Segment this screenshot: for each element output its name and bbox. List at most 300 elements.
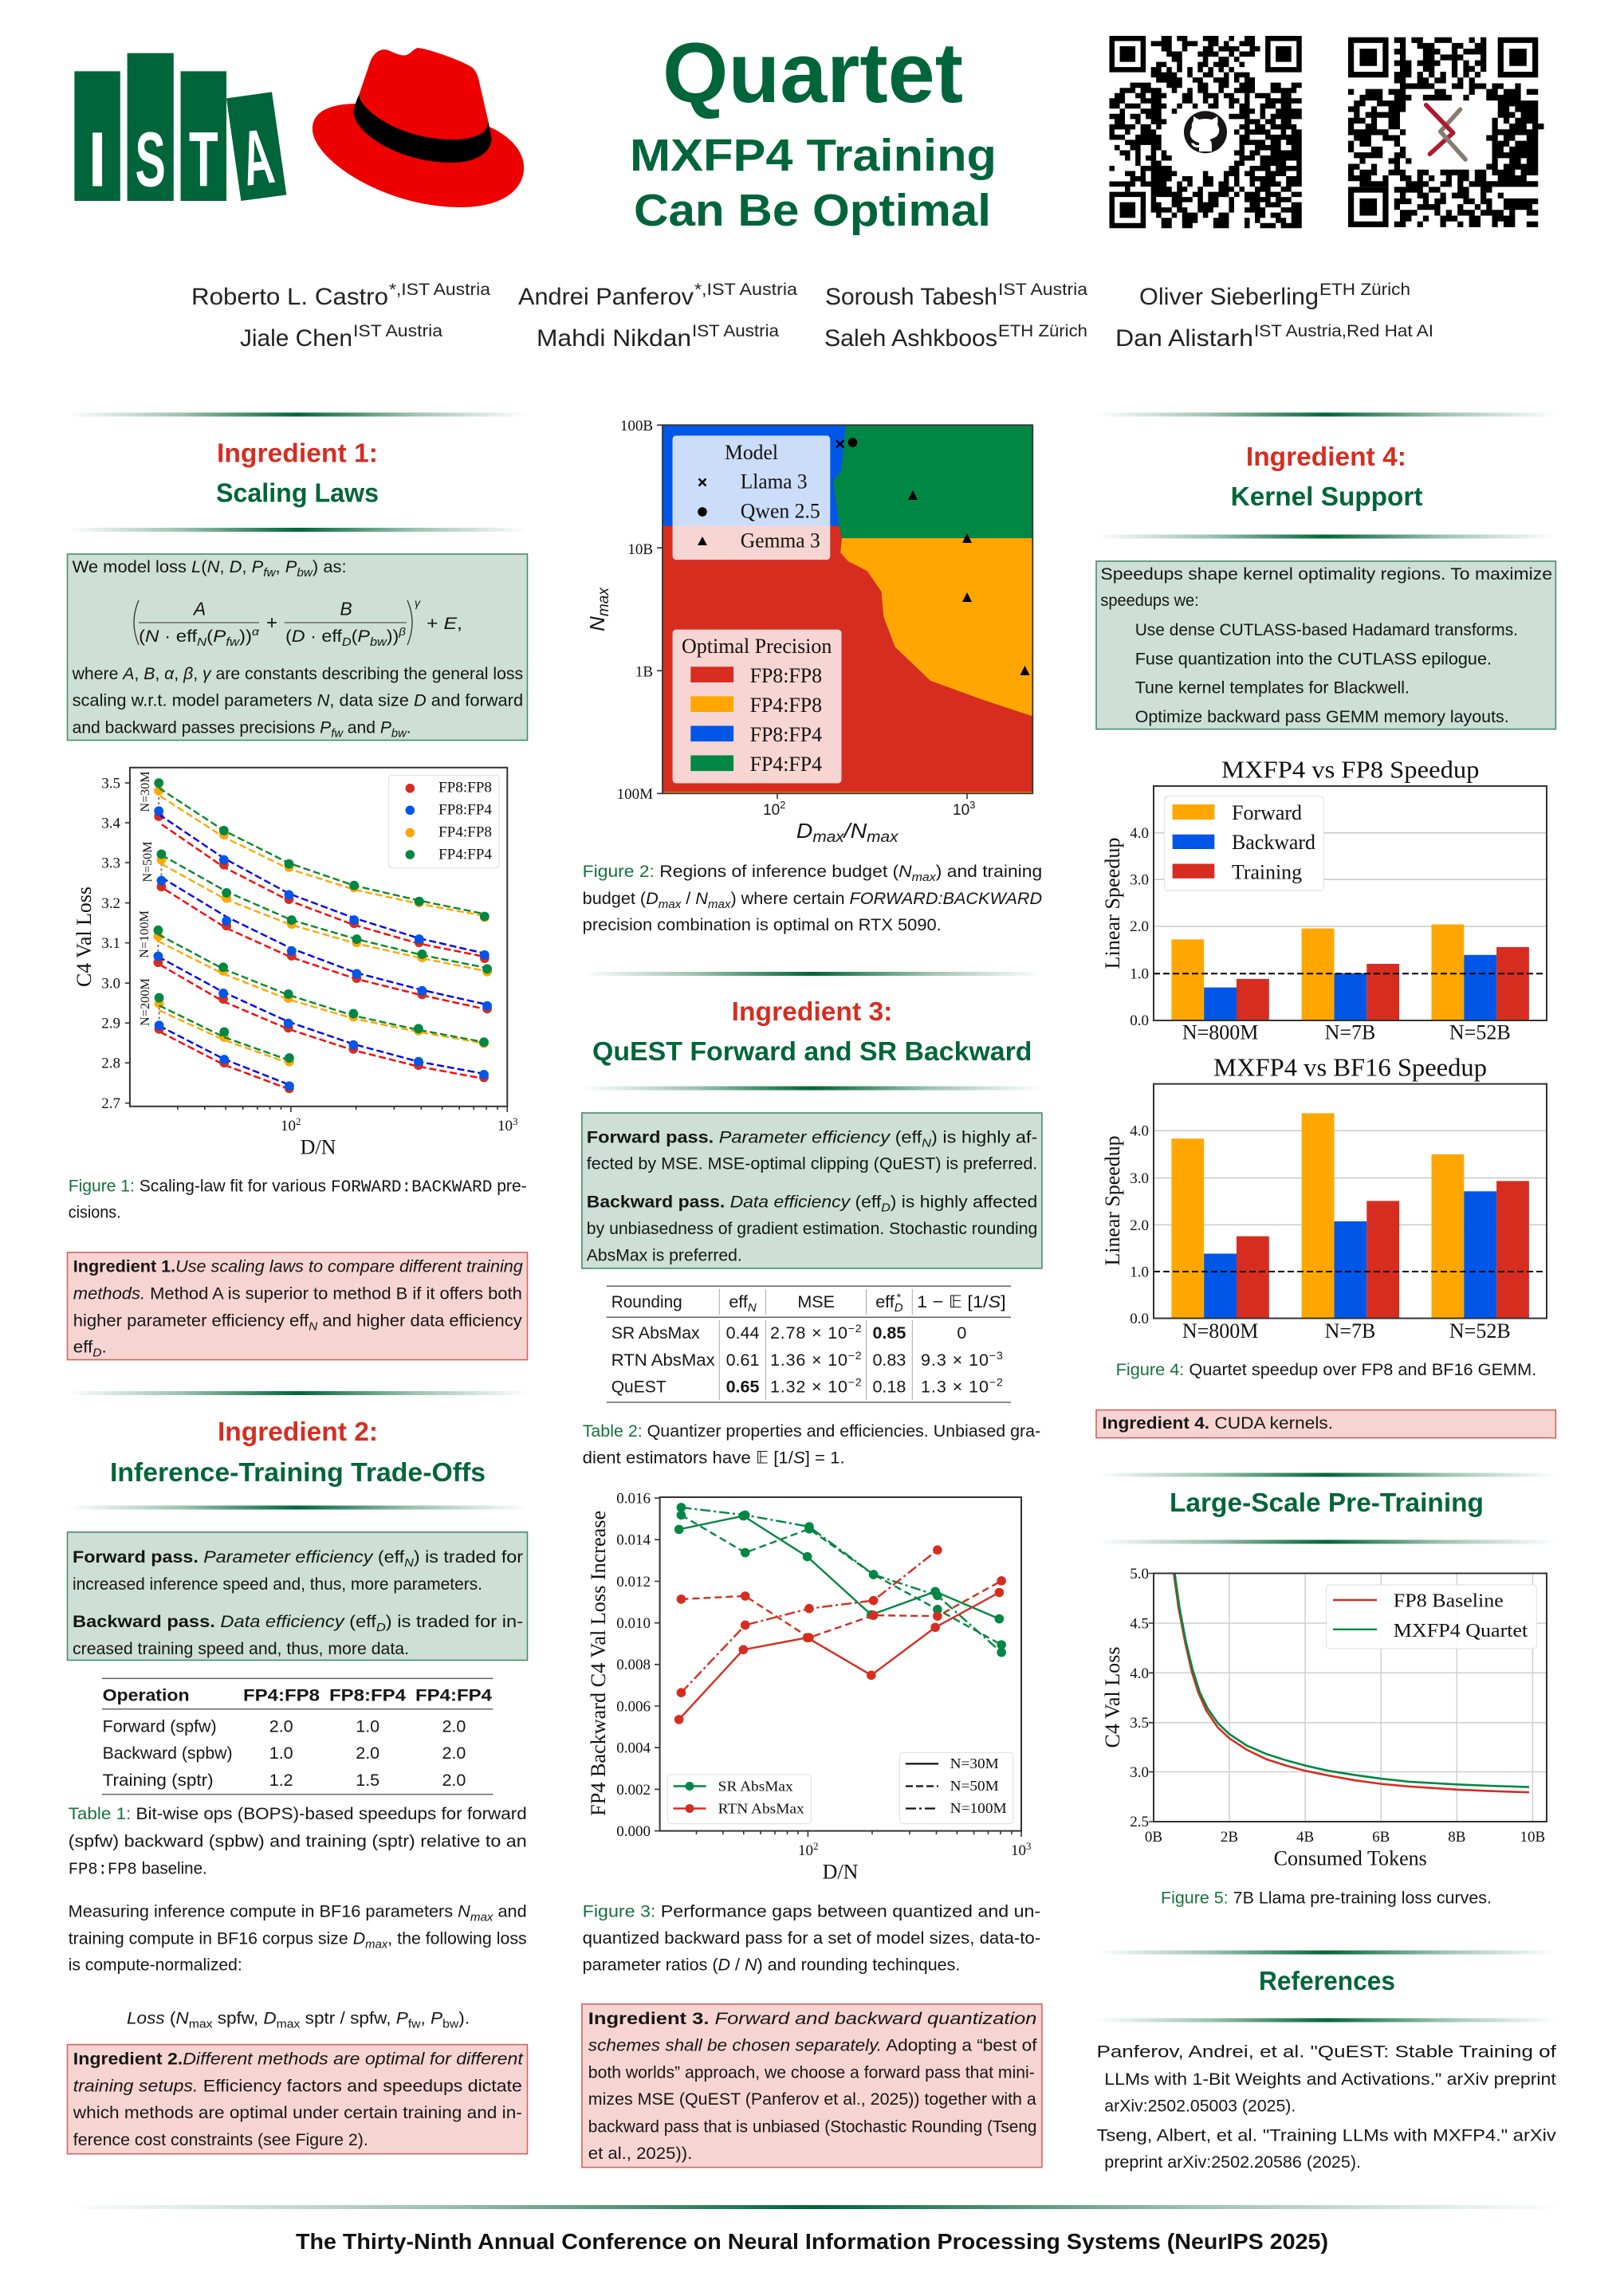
formula: scaling law: P bbox=[213, 627, 226, 646]
chart: pre-training loss curves (figure 5) bbox=[1101, 1566, 1547, 1870]
authors: Dan Alistarh bbox=[1115, 325, 1253, 352]
heading: Ingredient 1: Ingredient 1: bbox=[217, 438, 378, 467]
formula: scaling law: B bbox=[340, 598, 352, 619]
text block: compute-normalized loss: max bbox=[365, 1937, 388, 1951]
chart: pre-training loss curves (figure 5): C4 Val Loss bbox=[1101, 1647, 1124, 1748]
formula: scaling law: A bbox=[192, 598, 206, 619]
table 2: quantizer properties: 0.65 bbox=[726, 1377, 759, 1396]
chart: MXFP4 vs BF16 speedup bbox=[1101, 1052, 1547, 1343]
panel: kernel speedups: Fuse quantization into the CUTLASS epilogue. bbox=[1135, 649, 1492, 668]
text block: references: Tseng, Albert, et al. "Training LLMs with MXFP4." arXiv bbox=[1097, 2126, 1556, 2145]
panel: QuEST and SR explanation: Forward pass. Parameter efficiency (eff bbox=[587, 1127, 919, 1146]
text block: compute-normalized loss: , bbox=[421, 2009, 431, 2028]
authors: Jiale Chen bbox=[240, 325, 352, 352]
chart: scaling-law fit (figure 1): N=50M bbox=[141, 842, 155, 882]
chart: pre-training loss curves (figure 5): 4.5 bbox=[1130, 1615, 1149, 1633]
text block: compute-normalized loss: sptr / spfw, bbox=[300, 2009, 396, 2028]
table 1: speedups: 2.0 bbox=[356, 1744, 379, 1763]
chart: optimal precision regions (figure 2): max bbox=[812, 829, 845, 846]
table 1: speedups: 1.5 bbox=[356, 1771, 379, 1790]
chart: MXFP4 vs FP8 speedup: 3.0 bbox=[1130, 872, 1149, 888]
panel: QuEST and SR explanation: Backward pass. Data efficiency (eff bbox=[587, 1192, 879, 1211]
table 2: quantizer properties: 1.36 × 10 bbox=[770, 1350, 847, 1370]
caption: figure 1: Figure 1: Scaling-law fit for various FORWARD:BACKWARD pre- bbox=[69, 1176, 527, 1197]
logo: Red Hat bbox=[313, 48, 524, 207]
chart: scaling-law fit (figure 1): 3.3 bbox=[101, 855, 120, 872]
chart: optimal precision regions (figure 2): 1B bbox=[635, 663, 653, 680]
chart: scaling-law fit (figure 1) bbox=[73, 768, 518, 1159]
table 2: quantizer properties bbox=[607, 1286, 1011, 1402]
chart: MXFP4 vs BF16 speedup: 2.0 bbox=[1130, 1217, 1149, 1234]
panel: QuEST and SR explanation: N bbox=[922, 1136, 931, 1150]
authors: Roberto L. Castro bbox=[191, 284, 388, 310]
heading: Ingredient 4: Kernel Support bbox=[1231, 482, 1422, 511]
chart: scaling-law fit (figure 1): 3.2 bbox=[101, 895, 120, 912]
chart: pre-training loss curves (figure 5): 5.0 bbox=[1130, 1566, 1149, 1582]
chart: MXFP4 vs FP8 speedup: N=800M bbox=[1182, 1021, 1258, 1044]
chart: rounding performance gaps (figure 3): 0.016 bbox=[616, 1491, 651, 1507]
panel: QuEST and SR explanation: D bbox=[881, 1201, 891, 1214]
formula: scaling law: γ bbox=[415, 596, 421, 609]
callout: ingredient 1: . bbox=[102, 1337, 107, 1356]
model markers bbox=[836, 438, 1030, 675]
text block: compute-normalized loss: and bbox=[493, 1902, 527, 1921]
callout: ingredient 3 bbox=[582, 2004, 1042, 2168]
table 1: speedups: 2.0 bbox=[442, 1716, 466, 1736]
panel: forward and backward pass trade-offs: Forward pass. Parameter efficiency (eff bbox=[73, 1547, 402, 1567]
chart: MXFP4 vs BF16 speedup: 4.0 bbox=[1130, 1122, 1149, 1140]
table 1: speedups: Training (sptr) bbox=[103, 1771, 214, 1790]
text block: compute-normalized loss: ). bbox=[458, 2009, 470, 2028]
caption: table 2: Table 2: Quantizer properties and efficiencies. Unbiased gra- bbox=[583, 1421, 1040, 1441]
caption: table 1: Table 1: Bit-wise ops (BOPS)-based speedups for forward bbox=[69, 1804, 527, 1823]
panel: QuEST and SR explanation bbox=[582, 1113, 1042, 1268]
formula: scaling law bbox=[134, 596, 462, 649]
panel: loss model: , bbox=[276, 557, 285, 576]
chart: scaling-law fit (figure 1): 2.7 bbox=[101, 1095, 120, 1112]
panel: forward and backward pass trade-offs: D bbox=[376, 1621, 386, 1634]
text block: references bbox=[1097, 2042, 1556, 2172]
authors: Andrei Panferov bbox=[518, 284, 694, 310]
legend: forward, backward, training: Forward bbox=[1232, 801, 1302, 824]
panel: loss model: bw bbox=[391, 727, 407, 741]
logo: ISTA: T bbox=[189, 116, 218, 203]
table 2: quantizer properties: Rounding bbox=[611, 1292, 682, 1311]
panel: QuEST and SR explanation: fected by MSE. MSE-optimal clipping (QuEST) is preferred. bbox=[587, 1154, 1037, 1174]
chart: pre-training loss curves (figure 5): 8B bbox=[1448, 1829, 1465, 1846]
chart: scaling-law fit (figure 1): 3 bbox=[513, 1115, 518, 1127]
table 1: speedups: Operation bbox=[103, 1685, 190, 1704]
caption: figure 2: budget (D bbox=[583, 889, 659, 908]
chart: rounding performance gaps (figure 3): 0.006 bbox=[616, 1698, 651, 1716]
table 2: quantizer properties: 0.18 bbox=[872, 1377, 906, 1396]
panel: loss model: ) as: bbox=[313, 557, 347, 576]
chart: pre-training loss curves (figure 5): 6B bbox=[1372, 1829, 1390, 1846]
panel: forward and backward pass trade-offs: N bbox=[404, 1556, 414, 1570]
legend: model markers: Gemma 3 bbox=[741, 529, 820, 552]
callout: ingredient 3: backward pass that is unbiased (Stochastic Rounding (Tseng bbox=[588, 2117, 1036, 2136]
chart: scaling-law fit (figure 1): 3.1 bbox=[101, 935, 120, 952]
caption: table 2: dient estimators have 𝔼 [1/ S] = 1. bbox=[583, 1449, 845, 1468]
chart: optimal precision regions (figure 2): D bbox=[796, 819, 812, 843]
formula: scaling law: + E, bbox=[427, 614, 462, 633]
table 1: speedups bbox=[102, 1678, 493, 1795]
table 2: quantizer properties: 2.78 × 10 bbox=[770, 1323, 847, 1343]
table 1: speedups: FP4:FP8 bbox=[243, 1685, 320, 1704]
heading: Ingredient 1: Scaling Laws bbox=[216, 478, 379, 507]
panel: loss model: and bbox=[343, 718, 380, 737]
chart: scaling-law fit (figure 1): 10 bbox=[281, 1118, 296, 1134]
panel: forward and backward pass trade-offs bbox=[67, 1532, 528, 1660]
legend: optimal precision: FP8:FP4 bbox=[750, 723, 822, 746]
authors: Mahdi Nikdan bbox=[537, 325, 691, 352]
panel: loss model: fw bbox=[331, 727, 344, 741]
formula: scaling law: + bbox=[266, 612, 277, 634]
heading: Ingredient 2 bbox=[110, 1417, 486, 1487]
table 2: quantizer properties: MSE bbox=[797, 1292, 835, 1311]
chart: pre-training loss curves (figure 5): 3.5 bbox=[1130, 1715, 1149, 1732]
legend: model size bbox=[899, 1752, 1013, 1824]
table 2: quantizer properties: 1.32 × 10 bbox=[770, 1377, 847, 1396]
panel: kernel speedups: Speedups shape kernel optimality regions. To maximize bbox=[1100, 564, 1552, 584]
caption: figure 2: ) and training bbox=[936, 862, 1042, 881]
panel: forward and backward pass trade-offs: Backward pass. Data efficiency (eff bbox=[73, 1612, 373, 1631]
heading: Ingredient 2: Ingredient 2: bbox=[218, 1417, 378, 1446]
chart: pre-training loss curves (figure 5): 3.0 bbox=[1130, 1764, 1149, 1781]
formula: scaling law: fw bbox=[226, 635, 240, 649]
chart: scaling-law fit (figure 1): N=30M bbox=[139, 772, 152, 812]
authors: *,IST Austria bbox=[694, 281, 797, 299]
chart: scaling-law fit (figure 1): 10 bbox=[497, 1118, 513, 1134]
chart: MXFP4 vs BF16 speedup: 0.0 bbox=[1130, 1311, 1149, 1327]
caption: figure 2: ) where certain bbox=[730, 889, 850, 908]
legend: forward, backward, training: Backward bbox=[1232, 831, 1315, 854]
chart: MXFP4 vs BF16 speedup: 3.0 bbox=[1130, 1170, 1149, 1187]
chart: MXFP4 vs FP8 speedup: N=7B bbox=[1325, 1021, 1375, 1044]
authors: Oliver Sieberling bbox=[1139, 284, 1319, 310]
panel: kernel speedups: Use dense CUTLASS-based Hadamard transforms. bbox=[1135, 620, 1518, 639]
legend: model size: N=50M bbox=[950, 1778, 999, 1794]
table 2: quantizer properties: 1.3 × 10 bbox=[921, 1377, 989, 1396]
chart: pre-training loss curves (figure 5): 10B bbox=[1520, 1829, 1545, 1846]
callout: ingredient 3: mizes MSE (QuEST (Panferov et al., 2025)) together with a bbox=[588, 2090, 1036, 2109]
legend: optimal precision: FP4:FP8 bbox=[750, 694, 822, 717]
legend: forward, backward, training bbox=[1164, 796, 1323, 890]
authors: IST Austria,Red Hat AI bbox=[1254, 322, 1433, 340]
table 1: speedups: 2.0 bbox=[442, 1744, 466, 1763]
chart: scaling-law fit (figure 1): 2.9 bbox=[101, 1016, 120, 1032]
chart: rounding performance gaps (figure 3): 0.010 bbox=[616, 1615, 651, 1632]
legend: model markers: Llama 3 bbox=[741, 470, 808, 493]
caption: figure 2: / bbox=[681, 889, 695, 908]
panel: loss model: . bbox=[407, 718, 411, 737]
panel: loss model: fw bbox=[263, 566, 277, 580]
text block: references: LLMs with 1-Bit Weights and Activations." arXiv preprint bbox=[1104, 2070, 1556, 2089]
caption: figure 3: Figure 3: Performance gaps between quantized and un- bbox=[583, 1901, 1040, 1921]
panel: loss model: P bbox=[285, 557, 297, 576]
chart: rounding performance gaps (figure 3): D/N bbox=[823, 1861, 859, 1884]
caption: figure 2 bbox=[583, 862, 1042, 934]
chart: MXFP4 vs BF16 speedup: N=7B bbox=[1325, 1319, 1375, 1343]
chart: rounding performance gaps (figure 3): 0.008 bbox=[616, 1657, 651, 1673]
chart: MXFP4 vs FP8 speedup: Linear Speedup bbox=[1101, 838, 1124, 969]
formula: scaling law: N bbox=[197, 635, 206, 649]
callout: ingredient 1: eff bbox=[73, 1337, 92, 1356]
chart: MXFP4 vs FP8 speedup bbox=[1101, 755, 1547, 1044]
footer: The Thirty-Ninth Annual Conference on Neural Information Processing Systems (NeurIPS 2025) bbox=[296, 2229, 1328, 2254]
text block: compute-normalized loss bbox=[69, 1902, 527, 2031]
caption: table 1: FP8:FP8 baseline. bbox=[69, 1858, 207, 1879]
chart: rounding performance gaps (figure 3) bbox=[587, 1491, 1032, 1884]
caption: figure 2: max bbox=[912, 871, 936, 884]
legend: baseline vs Quartet: MXFP4 Quartet bbox=[1394, 1621, 1528, 1641]
callout: ingredient 1: higher parameter efficiency eff bbox=[73, 1311, 303, 1330]
table 1: speedups: 1.0 bbox=[356, 1716, 379, 1736]
formula: scaling law: α bbox=[252, 625, 260, 638]
text block: compute-normalized loss: D bbox=[263, 2009, 277, 2028]
legend: figure 1: FP4:FP8 bbox=[438, 824, 492, 840]
authors: *,IST Austria bbox=[389, 281, 490, 299]
callout: ingredient 2: ference cost constraints (see Figure 2). bbox=[73, 2130, 368, 2149]
chart: MXFP4 vs BF16 speedup: 1.0 bbox=[1130, 1264, 1149, 1280]
chart: pre-training loss curves (figure 5): 2.5 bbox=[1130, 1814, 1149, 1830]
table 2: quantizer properties: 9.3 × 10 bbox=[921, 1350, 989, 1370]
text block: compute-normalized loss: fw bbox=[408, 2017, 421, 2031]
authors: Saleh Ashkboos bbox=[824, 325, 997, 352]
legend: figure 1 bbox=[388, 775, 499, 868]
logo: ISTA: S bbox=[136, 116, 166, 203]
authors: IST Austria bbox=[998, 281, 1087, 299]
legend: figure 1: FP4:FP4 bbox=[438, 847, 493, 863]
chart: scaling-law fit (figure 1): 3.4 bbox=[101, 815, 121, 832]
legend: model markers: Model bbox=[725, 441, 778, 464]
table 2: quantizer properties: −2 bbox=[848, 1375, 862, 1388]
authors: Soroush Tabesh bbox=[825, 284, 997, 310]
title: Quartet bbox=[663, 25, 963, 120]
chart: MXFP4 vs FP8 speedup: MXFP4 vs FP8 Speedup bbox=[1221, 755, 1480, 783]
formula: scaling law: )) bbox=[387, 627, 399, 646]
legend: optimal precision: Optimal Precision bbox=[682, 635, 832, 658]
formula: scaling law: ( bbox=[352, 627, 358, 646]
table 1: speedups: FP4:FP4 bbox=[415, 1685, 492, 1704]
chart: scaling-law fit (figure 1): 3.5 bbox=[101, 775, 120, 792]
callout: ingredient 3: Ingredient 3. Forward and backward quantization bbox=[588, 2009, 1036, 2028]
panel: loss model: bw bbox=[297, 566, 313, 580]
table 2: quantizer properties: QuEST bbox=[611, 1377, 667, 1396]
chart: MXFP4 vs FP8 speedup: N=52B bbox=[1449, 1021, 1511, 1044]
logo: ISTA: A bbox=[235, 113, 279, 202]
legend: rounding method: RTN AbsMax bbox=[718, 1800, 804, 1816]
chart: rounding performance gaps (figure 3): 0.002 bbox=[616, 1782, 651, 1799]
text block: compute-normalized loss: max bbox=[277, 2017, 301, 2031]
chart: optimal precision regions (figure 2): max bbox=[596, 587, 612, 616]
chart: rounding performance gaps (figure 3): 0.014 bbox=[616, 1532, 651, 1549]
heading: Ingredient 1 bbox=[216, 438, 379, 507]
logo: ISTA: I bbox=[88, 116, 107, 203]
callout: ingredient 3: et al., 2025)). bbox=[588, 2144, 692, 2163]
heading: References: References bbox=[1259, 1966, 1395, 1995]
panel: forward and backward pass trade-offs: ) is traded for bbox=[414, 1547, 523, 1567]
formula: scaling law: )) bbox=[239, 627, 252, 646]
callout: ingredient 2 bbox=[67, 2045, 528, 2154]
panel: loss model: P bbox=[380, 718, 392, 737]
caption: figure 1: cisions. bbox=[69, 1203, 121, 1222]
QR code: paper bbox=[1348, 37, 1543, 227]
callout: ingredient 2: which methods are optimal under certain training and in- bbox=[73, 2103, 522, 2122]
table 2: quantizer properties: 0.83 bbox=[872, 1350, 906, 1370]
panel: forward and backward pass trade-offs: increased inference speed and, thus, more parameters. bbox=[73, 1575, 482, 1594]
panel: loss model: scaling w.r.t. model parameters N, data size D and forward bbox=[73, 691, 523, 710]
table 2: quantizer properties: 0.85 bbox=[872, 1323, 906, 1343]
table 2: quantizer properties: D bbox=[895, 1301, 903, 1315]
authors: IST Austria bbox=[692, 322, 779, 340]
chart: optimal precision regions (figure 2): 10 bbox=[763, 802, 780, 819]
table 2: quantizer properties: eff bbox=[729, 1292, 748, 1311]
callout: ingredient 2: Ingredient 2. Different methods are optimal for different bbox=[73, 2049, 524, 2068]
legend: optimal precision: FP8:FP8 bbox=[750, 664, 822, 687]
caption: figure 2: Figure 2: Regions of inference budget ( N bbox=[583, 862, 911, 881]
chart: scaling-law fit (figure 1): 3.0 bbox=[101, 976, 120, 992]
chart: MXFP4 vs FP8 speedup: 1.0 bbox=[1130, 966, 1149, 982]
title bbox=[630, 25, 997, 236]
callout: ingredient 4 bbox=[1096, 1410, 1555, 1438]
text block: compute-normalized loss: training compute in BF16 corpus size D bbox=[69, 1928, 365, 1948]
chart: MXFP4 vs BF16 speedup: N=800M bbox=[1182, 1319, 1258, 1343]
chart: optimal precision regions (figure 2) bbox=[585, 418, 1032, 846]
chart: rounding performance gaps (figure 3): 0.004 bbox=[616, 1740, 651, 1757]
panel: loss model bbox=[67, 554, 528, 741]
caption: figure 5: Figure 5: 7B Llama pre-training loss curves. bbox=[1161, 1888, 1492, 1907]
formula: scaling law: P bbox=[357, 627, 371, 646]
caption: figure 3: parameter ratios (D / N) and rounding techinques. bbox=[583, 1956, 960, 1975]
table 2: quantizer properties: −2 bbox=[848, 1349, 862, 1362]
chart: pre-training loss curves (figure 5): 2B bbox=[1221, 1829, 1238, 1846]
chart: scaling-law fit (figure 1): D/N bbox=[301, 1135, 336, 1159]
chart: optimal precision regions (figure 2): 100B bbox=[620, 418, 653, 434]
chart: MXFP4 vs FP8 speedup: 2.0 bbox=[1130, 918, 1149, 935]
formula: scaling law: ( bbox=[206, 627, 214, 646]
caption: figure 2: FORWARD:BACKWARD bbox=[850, 889, 1042, 908]
table 2: quantizer properties: −2 bbox=[989, 1375, 1003, 1388]
text block: compute-normalized loss: P bbox=[396, 2009, 408, 2028]
table 2: quantizer properties: 0 bbox=[957, 1323, 966, 1343]
callout: ingredient 2: training setups. Efficiency factors and speedups dictate bbox=[73, 2076, 522, 2095]
panel: kernel speedups: Optimize backward pass GEMM memory layouts. bbox=[1135, 707, 1509, 726]
authors: ETH Zürich bbox=[1319, 281, 1410, 299]
text block: compute-normalized loss: max bbox=[470, 1910, 493, 1924]
panel: QuEST and SR explanation: ) is highly af- bbox=[931, 1127, 1037, 1146]
legend: model markers: Qwen 2.5 bbox=[741, 499, 820, 522]
chart: rounding performance gaps (figure 3): 0.000 bbox=[616, 1823, 651, 1840]
caption: figure 1 bbox=[69, 1176, 527, 1222]
chart: optimal precision regions (figure 2): max bbox=[867, 829, 899, 846]
callout: ingredient 1: N bbox=[309, 1319, 317, 1333]
panel: kernel speedups bbox=[1096, 561, 1555, 729]
table 1: speedups: 1.0 bbox=[269, 1744, 293, 1763]
legend: optimal precision: FP4:FP4 bbox=[750, 753, 822, 776]
text block: references: preprint arXiv:2502.20586 (2025). bbox=[1104, 2152, 1361, 2172]
chart: optimal precision regions (figure 2): N bbox=[585, 616, 609, 631]
table 2: quantizer properties: SR AbsMax bbox=[611, 1323, 700, 1343]
table 2: quantizer properties: * bbox=[897, 1291, 902, 1303]
chart: MXFP4 vs BF16 speedup: N=52B bbox=[1449, 1319, 1511, 1343]
chart: scaling-law fit (figure 1): N=200M bbox=[139, 978, 152, 1026]
panel: forward and backward pass trade-offs: creased training speed and, thus, more data. bbox=[73, 1639, 409, 1658]
caption: table 1 bbox=[69, 1804, 527, 1879]
heading: Ingredient 3: QuEST Forward and SR Backward bbox=[592, 1036, 1032, 1066]
caption: figure 2: max bbox=[708, 898, 731, 911]
heading: Ingredient 3 bbox=[592, 997, 1032, 1066]
panel: loss model: and backward passes precisions P bbox=[73, 718, 332, 737]
chart: MXFP4 vs BF16 speedup: Linear Speedup bbox=[1101, 1135, 1124, 1266]
legend: baseline vs Quartet bbox=[1327, 1585, 1536, 1649]
panel: kernel speedups: speedups we: bbox=[1100, 591, 1199, 610]
authors bbox=[191, 281, 1433, 352]
panel: kernel speedups: Tune kernel templates for Blackwell. bbox=[1135, 678, 1410, 698]
formula: scaling law: (D · eff bbox=[285, 627, 339, 646]
authors: ETH Zürich bbox=[998, 322, 1087, 340]
chart: MXFP4 vs FP8 speedup: 0.0 bbox=[1130, 1012, 1149, 1029]
table 1: speedups: 2.0 bbox=[442, 1771, 466, 1790]
formula: scaling law: (N · eff bbox=[139, 627, 193, 646]
table 2: quantizer properties: RTN AbsMax bbox=[611, 1350, 715, 1370]
chart: scaling-law fit (figure 1): 2.8 bbox=[101, 1056, 120, 1071]
chart: pre-training loss curves (figure 5): Consumed Tokens bbox=[1274, 1846, 1427, 1870]
panel: loss model: where A, B, α, β, γ are constants describing the general loss bbox=[72, 664, 523, 683]
authors: IST Austria bbox=[353, 322, 442, 340]
logo: ISTA bbox=[74, 53, 286, 203]
title: MXFP4 Training bbox=[630, 130, 997, 181]
chart: optimal precision regions (figure 2): 10B bbox=[627, 541, 653, 558]
table 2: quantizer properties: −3 bbox=[989, 1349, 1003, 1362]
panel: QuEST and SR explanation: by unbiasedness of gradient estimation. Stochastic rounding bbox=[587, 1219, 1037, 1238]
legend: figure 1: FP8:FP8 bbox=[438, 780, 492, 796]
table 1: speedups: Backward (spbw) bbox=[103, 1744, 233, 1763]
callout: ingredient 1: and higher data efficiency bbox=[317, 1311, 522, 1330]
text block: references: Panferov, Andrei, et al. "QuEST: Stable Training of bbox=[1097, 2042, 1556, 2062]
formula: scaling law: D bbox=[342, 635, 352, 649]
caption: figure 2: precision combination is optimal on RTX 5090. bbox=[583, 915, 942, 934]
chart: rounding performance gaps (figure 3): 2 bbox=[813, 1840, 818, 1852]
title: Can Be Optimal bbox=[634, 185, 991, 236]
legend: rounding method: SR AbsMax bbox=[718, 1778, 793, 1794]
callout: ingredient 4: Ingredient 4. CUDA kernels. bbox=[1102, 1413, 1333, 1433]
legend: rounding method bbox=[667, 1775, 811, 1824]
chart: pre-training loss curves (figure 5): 4.0 bbox=[1130, 1665, 1149, 1682]
chart: pre-training loss curves (figure 5): 4B bbox=[1296, 1829, 1314, 1846]
formula: scaling law: bw bbox=[370, 635, 387, 649]
callout: ingredient 1: D bbox=[92, 1346, 102, 1359]
heading: Large-Scale Pre-Training: Large-Scale Pre-Training bbox=[1170, 1488, 1484, 1517]
text block: compute-normalized loss: bw bbox=[442, 2017, 458, 2031]
text block: compute-normalized loss: Loss (N bbox=[127, 2009, 188, 2028]
chart: scaling-law fit (figure 1): C4 Val Loss bbox=[73, 887, 96, 987]
chart: MXFP4 vs BF16 speedup: MXFP4 vs BF16 Speedup bbox=[1213, 1052, 1487, 1081]
legend: optimal precision bbox=[682, 635, 832, 776]
caption: table 1: (spfw) backward (spbw) and training (sptr) relative to an bbox=[69, 1832, 527, 1851]
text block: compute-normalized loss: max bbox=[189, 2017, 213, 2031]
text block: compute-normalized loss: , the following loss bbox=[387, 1928, 527, 1948]
callout: ingredient 1 bbox=[67, 1252, 528, 1360]
heading: Ingredient 4 bbox=[1231, 442, 1422, 511]
text block: references: arXiv:2502.05003 (2025). bbox=[1104, 2096, 1296, 2115]
legend: figure 1: FP8:FP4 bbox=[438, 802, 493, 818]
table 1: speedups: 1.2 bbox=[269, 1771, 293, 1790]
chart: optimal precision regions (figure 2): /N bbox=[843, 819, 867, 843]
chart: optimal precision regions (figure 2): 100M bbox=[617, 786, 653, 803]
text block: compute-normalized loss: P bbox=[431, 2009, 443, 2028]
panel: forward and backward pass trade-offs: ) is traded for in- bbox=[386, 1612, 523, 1631]
